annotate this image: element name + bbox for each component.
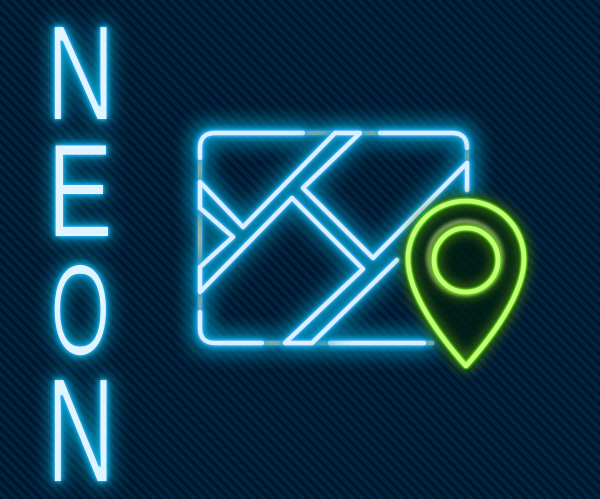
- pin dark interior: [408, 200, 524, 367]
- map roads: [200, 133, 467, 343]
- vertical neon word: [46, 0, 115, 499]
- map bright border segments: [200, 133, 467, 343]
- pin inner ring haze: [429, 222, 501, 294]
- map faint outline: [200, 133, 467, 343]
- pin inner ring: [434, 228, 498, 292]
- letter O: O: [50, 238, 111, 382]
- icon: location pin: [408, 200, 524, 367]
- letter N (top): N: [46, 0, 115, 148]
- icon: folded map: [200, 133, 467, 343]
- letter E: E: [46, 116, 113, 265]
- pin outline: [408, 201, 524, 366]
